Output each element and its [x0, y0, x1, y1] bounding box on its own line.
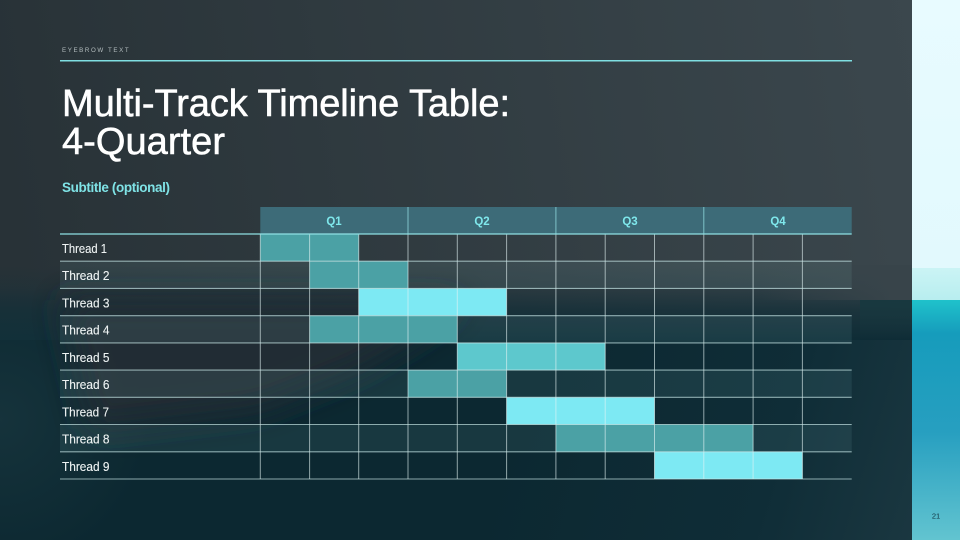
title: Multi-Track Timeline Table: [62, 83, 510, 125]
thread labels: Thread 6 [62, 378, 110, 392]
page number: 21 [932, 512, 940, 520]
thread labels: Thread 3 [62, 296, 110, 310]
thread labels: Thread 7 [62, 405, 109, 419]
timeline table [60, 207, 852, 479]
quarter header row [260, 207, 852, 234]
thread labels: Thread 2 [62, 269, 110, 283]
quarter header row: Q1 [326, 216, 342, 228]
thread labels: Thread 8 [62, 432, 110, 446]
thread labels [62, 242, 110, 474]
quarter header row: Q2 [474, 216, 490, 228]
thread labels: Thread 1 [62, 242, 107, 256]
subtitle: Subtitle (optional) [62, 180, 170, 195]
quarter header row: Q3 [622, 216, 638, 228]
right side band [912, 0, 960, 540]
thread labels: Thread 4 [62, 324, 110, 338]
eyebrow text: EYEBROW TEXT [62, 47, 130, 54]
eyebrow rule [60, 60, 852, 62]
thread labels: Thread 9 [62, 460, 110, 474]
quarter header row: Q4 [770, 216, 786, 228]
schedule bars [260, 234, 802, 479]
title: 4-Quarter [62, 121, 225, 163]
thread labels: Thread 5 [62, 351, 110, 365]
grid lines [60, 234, 852, 479]
alternating row shading [60, 261, 852, 452]
